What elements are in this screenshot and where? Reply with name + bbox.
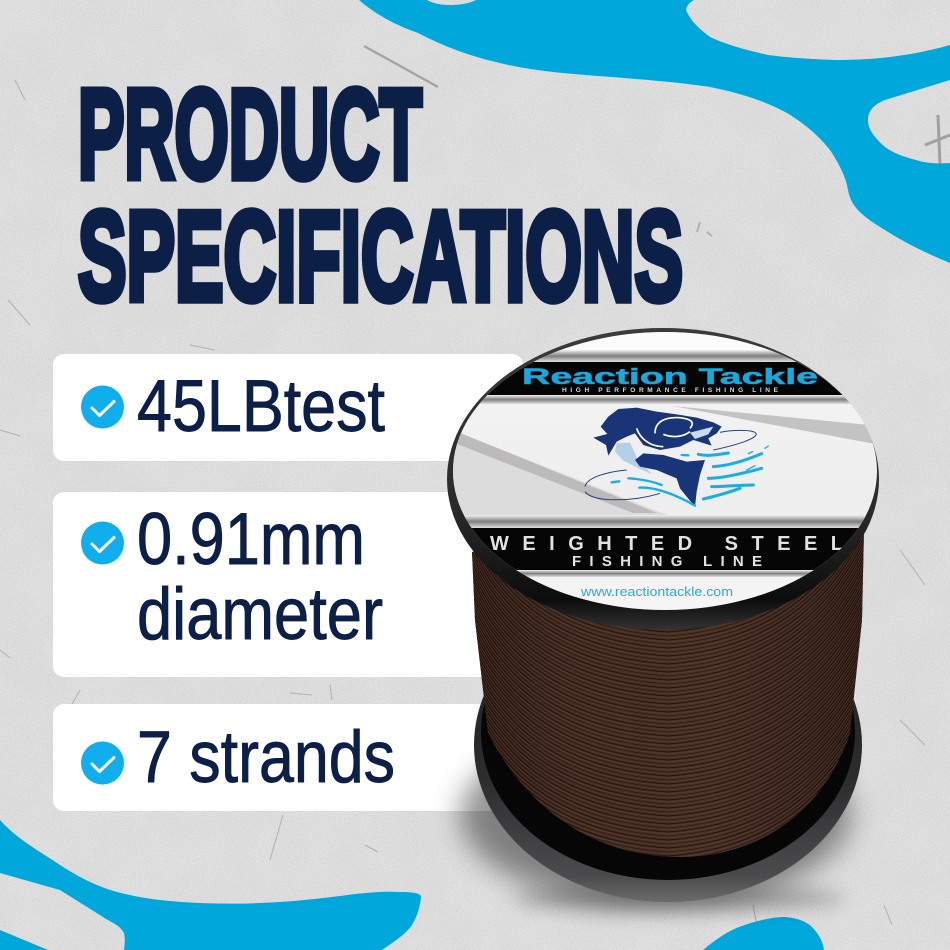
card: strands — [53, 704, 523, 811]
product name line 2: FISHING LINE — [572, 553, 762, 570]
bottom black band — [464, 515, 866, 577]
bottom flange — [474, 584, 862, 902]
blue paint shape: top right — [359, 0, 950, 263]
blue paint shape: bottom left corner — [0, 930, 48, 950]
spool of fishing line — [440, 320, 890, 910]
icon: check badge — [81, 386, 124, 428]
card: line test — [53, 354, 523, 461]
blue paint shape: bottom right — [703, 917, 824, 950]
title line 1: PRODUCT — [78, 63, 422, 205]
title — [78, 63, 683, 327]
brand tagline: HIGH PERFORMANCE FISHING LINE — [562, 387, 779, 394]
icon: check badge — [81, 522, 124, 564]
brand name: Reaction Tackle — [522, 364, 818, 389]
website url: www.reactiontackle.com — [580, 585, 733, 599]
text: 45LB test: 45LBtest — [137, 366, 385, 447]
top label — [453, 332, 877, 610]
text: 0.91mm diameter: 0.91mm — [137, 499, 365, 580]
spool cast shadow — [460, 725, 850, 910]
text: 0.91mm diameter: diameter — [137, 574, 383, 655]
blue paint shape: bottom left — [0, 820, 421, 950]
icon: check badge — [81, 742, 124, 784]
product name line 1: WEIGHTED STEEL — [490, 533, 843, 555]
card: diameter — [53, 492, 523, 677]
top flange rim — [447, 328, 879, 630]
top black band — [479, 350, 850, 404]
wound brown line — [472, 534, 864, 857]
text: 0.91mm diameter — [137, 499, 383, 655]
text: 7 strands: 7 strands — [137, 717, 395, 798]
icon: leaping fish logo — [585, 408, 768, 507]
label diagonal grey facets — [450, 406, 880, 520]
